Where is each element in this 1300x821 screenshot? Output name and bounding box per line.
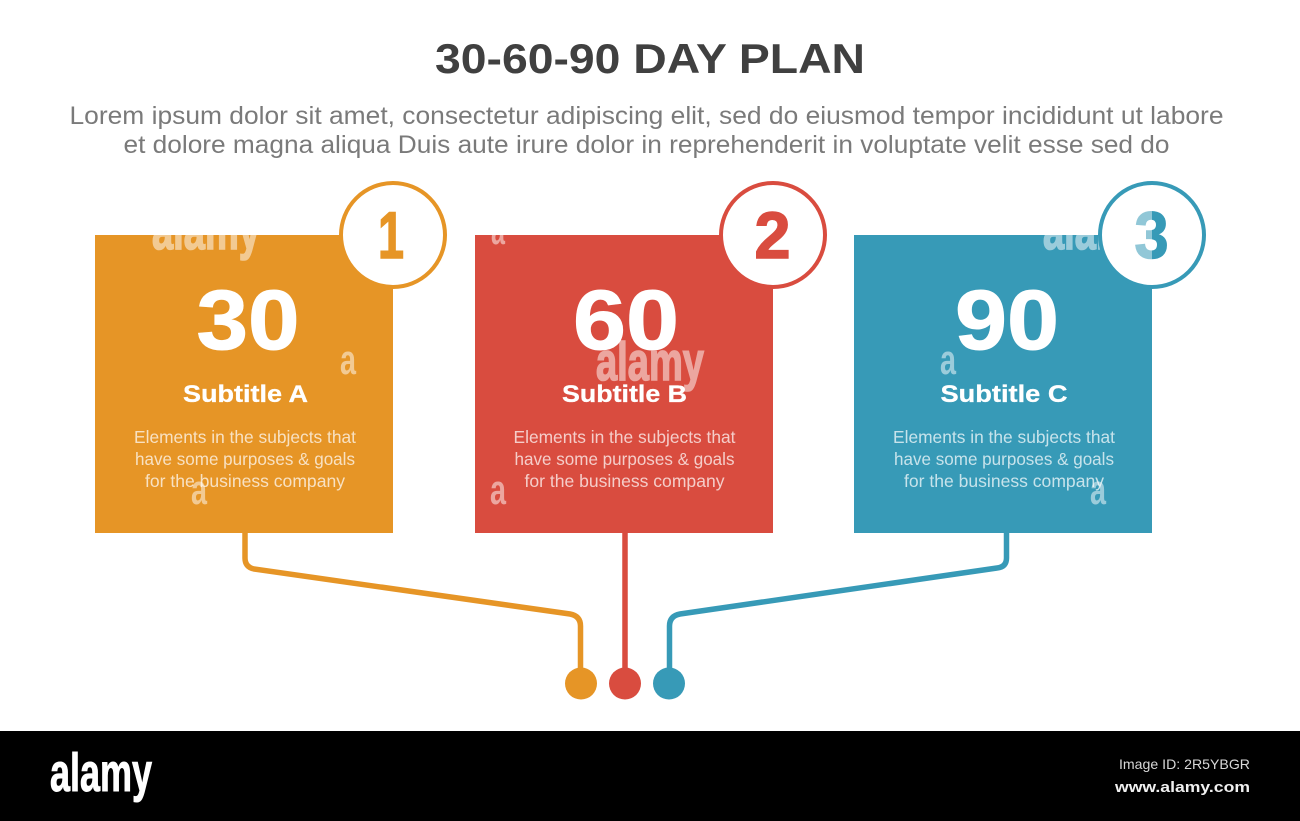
description: Elements in the subjects that (134, 427, 356, 447)
panel: 30 days (95, 183, 445, 533)
description: have some purposes & goals (514, 449, 735, 469)
description (893, 427, 1115, 491)
watermark fragments (152, 235, 356, 504)
image id: Image ID: 2R5YBGR (1119, 756, 1250, 772)
watermark fragments: a (940, 336, 956, 383)
panel: 90 days (854, 183, 1204, 533)
watermark fragments: a (191, 466, 207, 513)
intro paragraph: Lorem ipsum dolor sit amet, consectetur adipiscing elit, sed do eiusmod tempor incididunt ut labore (70, 102, 1224, 130)
description: for the business company (145, 471, 345, 491)
connector: red line and dot (609, 533, 641, 700)
description (514, 427, 736, 491)
description (134, 427, 356, 491)
description: Elements in the subjects that (514, 427, 736, 447)
title: 30-60-90 DAY PLAN (435, 35, 865, 82)
connector: orange line and dot (245, 533, 597, 700)
subtitle: Subtitle C (940, 381, 1068, 408)
day number: 30 (196, 273, 300, 367)
subtitle: Subtitle B (562, 381, 687, 408)
description: for the business company (904, 471, 1104, 491)
description: for the business company (524, 471, 725, 491)
watermark fragments: a (490, 466, 506, 513)
number badge 2: 2 (754, 198, 790, 272)
number badge 3 (1100, 183, 1204, 287)
number badge 1 (341, 183, 445, 287)
card background (854, 235, 1152, 533)
description: have some purposes & goals (135, 449, 355, 469)
number badge 2 (721, 183, 825, 287)
watermark fragments: a (1090, 466, 1106, 513)
watermark fragments: alamy (596, 332, 704, 392)
watermark fragments: alamy (152, 201, 260, 261)
day number: 60 (573, 273, 679, 367)
number badge 3: 3 (1134, 198, 1168, 272)
panel: 60 days (475, 183, 825, 533)
watermark fragments: a (340, 336, 356, 383)
intro paragraph: et dolore magna aliqua Duis aute irure dolor in reprehenderit in voluptate velit esse sed do (124, 131, 1170, 159)
card background (475, 235, 773, 533)
intro paragraph (70, 102, 1224, 159)
footer bar (0, 731, 1300, 821)
watermark fragments (940, 235, 1106, 504)
day number: 90 (955, 273, 1059, 367)
website: www.alamy.com (1114, 779, 1250, 796)
connector: teal line and dot (653, 533, 1006, 700)
number badge 1: 1 (378, 198, 404, 272)
watermark fragments: alamy (1043, 201, 1151, 261)
description: Elements in the subjects that (893, 427, 1115, 447)
footer logo: alamy (50, 743, 152, 803)
watermark fragments (490, 235, 704, 504)
card background (95, 235, 393, 533)
description: have some purposes & goals (894, 449, 1114, 469)
subtitle: Subtitle A (183, 381, 308, 408)
watermark fragments: a (491, 206, 505, 253)
